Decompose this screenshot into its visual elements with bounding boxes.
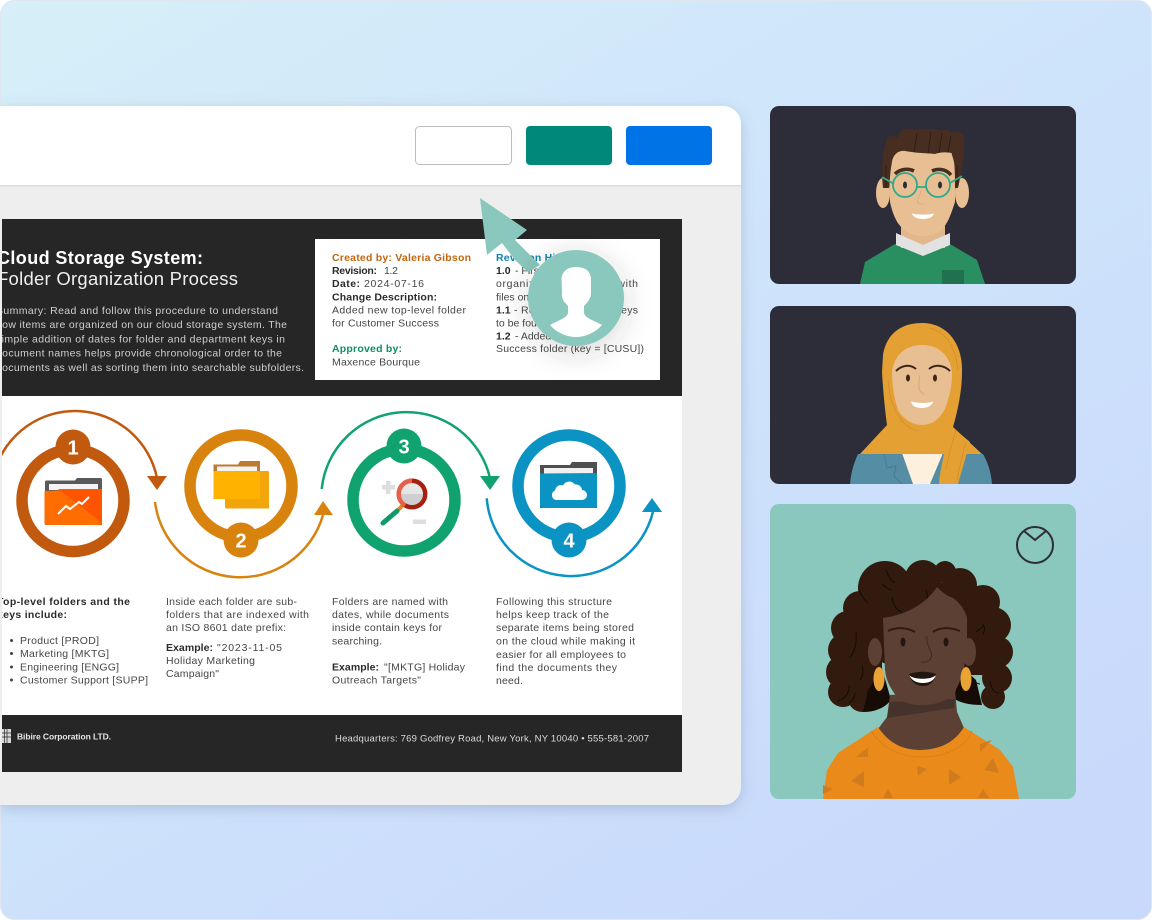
created by block: Created by: Valeria Gibson: [332, 252, 471, 264]
window body: [0, 106, 741, 805]
icon: cloud folder: [540, 462, 597, 508]
neck shadow: [887, 699, 955, 718]
revision history block: files on the cloud: [496, 292, 575, 304]
eyes: [903, 182, 907, 188]
curl strands: [838, 570, 999, 703]
ears: [876, 178, 890, 208]
title: Cloud Storage System:: [0, 248, 203, 268]
icon: orange folder with chart: [44, 478, 102, 525]
created by block: 2024-07-16: [364, 278, 424, 290]
application window: [0, 106, 741, 805]
revision history block: - First level folders: [515, 265, 601, 277]
revision box: [315, 239, 660, 380]
smile: [912, 214, 934, 219]
face: [883, 587, 967, 705]
badge 2: [224, 522, 258, 558]
column 4 text: helps keep track of the: [496, 609, 609, 621]
icon: timer: [1017, 527, 1053, 563]
window toolbar: [0, 106, 741, 185]
revision history block: - Revised document keys: [514, 304, 638, 316]
column 2 text: Inside each folder are sub-: [166, 596, 298, 608]
step 1: [0, 411, 167, 552]
column 2 text: Example:: [166, 642, 213, 654]
badge 1: [56, 430, 90, 464]
summary text: Summary: Read and follow this procedure to understand: [0, 305, 278, 317]
column 1 text: [0, 596, 148, 686]
column 3 text: "[MKTG] Holiday: [384, 662, 466, 674]
eyebrows: [895, 169, 951, 175]
revision history block: organization of folders with: [496, 278, 638, 290]
mouth: [909, 672, 936, 686]
title: [0, 248, 238, 289]
video card: man with glasses: [770, 106, 1076, 284]
footer band: [2, 715, 682, 772]
summary text: how items are organized on our cloud storage system. The: [0, 319, 287, 331]
jacket lapel line: [884, 454, 902, 484]
arrow 2: [155, 501, 333, 577]
column 2 text: folders that are indexed with: [166, 609, 309, 621]
column 2 text: [166, 596, 309, 680]
video card: woman with hijab: [770, 306, 1076, 484]
column 1 text: Product [PROD]: [20, 635, 99, 647]
header band: [0, 219, 682, 396]
ring 2: [190, 435, 292, 537]
scarf folds: [888, 328, 966, 480]
ring 1: [22, 450, 124, 552]
button: white: [416, 126, 512, 164]
summary text: [0, 305, 304, 374]
eyebrows: [896, 366, 950, 371]
column 4 text: separate items being stored: [496, 622, 634, 634]
revision history block: - Added Customer: [515, 330, 600, 342]
column 3 text: Outreach Targets": [332, 674, 421, 686]
summary text: simple addition of dates for folder and department keys in: [0, 334, 285, 346]
face: [889, 148, 955, 236]
step 3: [322, 412, 500, 551]
eyebrows: [888, 628, 960, 632]
ears: [868, 638, 882, 666]
column 4 text: find the documents they: [496, 662, 618, 674]
sweater pattern: [823, 740, 999, 798]
column 3 text: Folders are named with: [332, 596, 448, 608]
nose: [919, 375, 924, 394]
sweater: [823, 727, 1019, 799]
nose: [921, 636, 932, 662]
column 3 text: Example:: [332, 662, 379, 674]
neck: [901, 220, 945, 248]
column 2 text: an ISO 8601 date prefix:: [166, 622, 286, 634]
column 1 text: Marketing [MKTG]: [20, 648, 109, 660]
neck: [878, 690, 964, 750]
created by block: Change Description:: [332, 292, 437, 304]
approved by block: [332, 344, 420, 368]
step 2: [155, 435, 333, 577]
revision history block: [496, 252, 644, 355]
arrow 4: [487, 498, 662, 576]
revision history block: 1.2: [496, 330, 511, 342]
created by block: [332, 252, 471, 330]
step 4: [487, 435, 662, 576]
badge 3: 3: [398, 436, 410, 458]
icon: yellow folders: [214, 461, 269, 508]
icon: magnifying glass: [382, 478, 428, 524]
revision history block: Revision History: [496, 252, 582, 264]
hair strands: [886, 132, 957, 188]
revision history block: to be found by all: [496, 318, 576, 330]
title: Folder Organization Process: [0, 268, 238, 289]
badge 1: 1: [67, 438, 79, 460]
summary text: document names helps provide chronological order to the: [0, 348, 282, 360]
company name: Bibire Corporation LTD.: [17, 732, 111, 742]
column 3 text: searching.: [332, 636, 382, 648]
shirt: [902, 453, 943, 484]
summary text: documents as well as sorting them into searchable subfolders.: [0, 362, 304, 374]
column 1 text: Customer Support [SUPP]: [20, 674, 148, 686]
column 1 text: Top-level folders and the: [0, 596, 130, 608]
sweater collar: [871, 731, 972, 757]
avatar: [528, 250, 624, 346]
hair: [882, 128, 964, 188]
column 4 text: Following this structure: [496, 596, 612, 608]
dark back hair right: [953, 668, 982, 705]
smile: [911, 402, 933, 408]
column 4 text: [496, 596, 635, 687]
ring 4: [518, 435, 620, 537]
column 3 text: inside contain keys for: [332, 622, 442, 634]
hijab: [860, 323, 982, 454]
created by block: Added new top-level folder: [332, 304, 466, 316]
document: [0, 219, 682, 772]
revision history block: 1.1: [496, 304, 511, 316]
earrings: [874, 667, 884, 691]
face: [892, 345, 952, 425]
column 3 text: [332, 596, 466, 686]
eyes: [900, 638, 906, 646]
created by block: for Customer Success: [332, 318, 439, 330]
ring 3: [353, 449, 455, 551]
badge 4: 4: [563, 530, 575, 552]
contact line: Headquarters: 769 Godfrey Road, New York, NY 10040 • 555-581-2007: [335, 734, 649, 744]
approved by block: Maxence Bourque: [332, 356, 420, 368]
pocket: [942, 270, 964, 284]
created by block: 1.2: [384, 265, 398, 277]
created by block: Date:: [332, 278, 360, 290]
video card: woman with curly hair: [770, 504, 1076, 799]
cursor arrow: [480, 198, 540, 272]
jacket: [850, 454, 992, 484]
arrow 1: [0, 411, 167, 490]
button: blue: [626, 126, 712, 165]
scarf tail: [939, 427, 970, 484]
arrow 3: [322, 412, 500, 490]
badge 3: [386, 428, 422, 464]
badge 4: [552, 522, 586, 558]
column 4 text: easier for all employees to: [496, 649, 626, 661]
dark back hair left: [863, 668, 891, 712]
sweater: [860, 244, 985, 284]
button: green: [526, 126, 612, 165]
column 2 text: Campaign": [166, 668, 219, 680]
approved by block: Approved by:: [332, 343, 402, 355]
collar: [896, 233, 950, 256]
icon: building: [2, 729, 11, 743]
column 2 text: "2023-11-05: [217, 642, 282, 654]
eyes: [906, 374, 910, 382]
curly hair: [826, 560, 1013, 712]
column 1 text: Engineering [ENGG]: [20, 662, 119, 674]
document page: [2, 396, 682, 715]
icon: person silhouette: [550, 267, 602, 337]
column 4 text: need.: [496, 675, 523, 687]
nose: [917, 190, 924, 204]
created by block: Revision:: [332, 265, 377, 277]
glasses: [882, 173, 962, 197]
column 3 text: dates, while documents: [332, 609, 449, 621]
revision history block: 1.0: [496, 265, 511, 277]
revision history block: Success folder (key = [CUSU]): [496, 343, 644, 355]
column 2 text: Holiday Marketing: [166, 655, 255, 667]
badge 2: 2: [235, 530, 247, 552]
column 4 text: on the cloud while making it: [496, 636, 635, 648]
